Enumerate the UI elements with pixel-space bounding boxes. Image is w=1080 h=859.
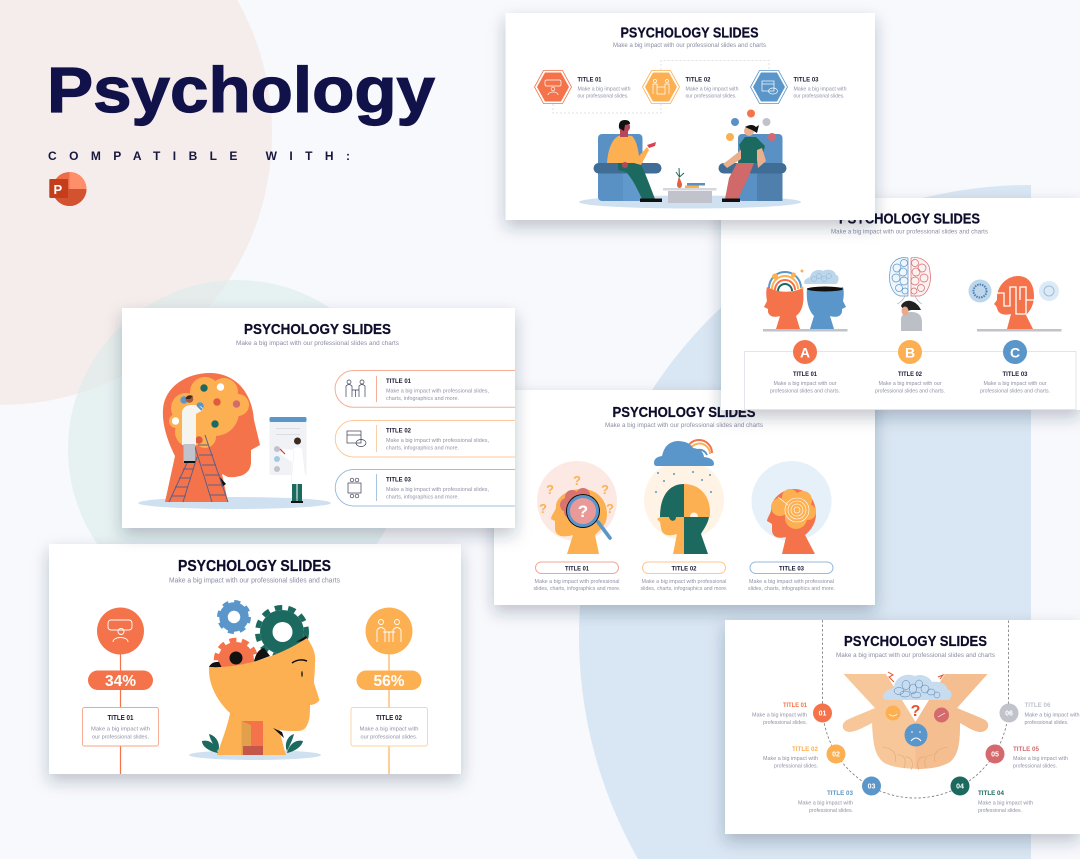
illustration B: brain and woman	[889, 258, 931, 331]
step 03: professional slides.	[809, 808, 853, 814]
step 03: 03	[868, 784, 875, 790]
illustration: doctor	[280, 438, 306, 503]
info box	[744, 352, 1076, 410]
timeline right	[351, 608, 428, 774]
panel: heads A B C slide (right)	[721, 198, 1080, 410]
illustration: puzzle head with rain cloud	[644, 440, 724, 554]
illustration: head with magnifier: ?	[539, 501, 547, 516]
text block: title 03: Make a big impact with our	[984, 381, 1047, 387]
illustration: checklist board	[270, 417, 306, 475]
icon circle: counselling	[97, 608, 144, 654]
badge C: C	[1010, 344, 1020, 360]
subheading: Make a big impact with our professional slides and charts	[831, 228, 989, 236]
text block: title 02	[640, 579, 728, 592]
dashed arc connector	[822, 620, 1008, 798]
badge B	[898, 340, 922, 364]
gear: orange	[216, 640, 256, 680]
step 06: 06	[1005, 710, 1013, 718]
subheading: Make a big impact with our professional slides and charts	[836, 652, 996, 659]
background circle: teal	[68, 280, 406, 618]
option: title 03: Make a big impact with professional slides,	[386, 487, 490, 493]
thought cloud	[804, 270, 839, 284]
step 01	[752, 702, 832, 726]
hexagon item: title 02: TITLE 02	[686, 76, 711, 84]
text block: title 01: TITLE 01	[793, 371, 817, 378]
subtitle: compatible with: COMPATIBLE WITH:	[48, 149, 350, 163]
pill label: title 01	[536, 562, 618, 574]
illustration: head with magnifier: ?	[606, 501, 614, 516]
stat: 56%: 56%	[373, 673, 405, 690]
brain: red half	[911, 258, 931, 296]
text block: title 02: Make a big impact with professional	[642, 579, 726, 585]
illustration: head with magnifier: ?	[578, 502, 588, 521]
timeline left	[82, 608, 158, 774]
text block: title 01: professional slides and charts.	[770, 388, 840, 394]
step 03: Make a big impact with	[798, 800, 853, 806]
step 04	[950, 776, 1033, 814]
background circle: blue	[579, 185, 1031, 859]
illustration: left armchair	[594, 134, 662, 201]
text block: title 03: professional slides and charts.	[980, 388, 1050, 394]
step 05: 05	[991, 752, 999, 758]
gear: blue	[219, 602, 249, 632]
badge C	[1003, 340, 1027, 364]
option: title 03: charts, infographics and more.	[386, 494, 459, 500]
icon: PowerPoint logo: P	[54, 182, 62, 197]
heading: PSYCHOLOGY SLIDES	[839, 210, 980, 228]
pill label: title 02	[642, 562, 726, 574]
hexagon item: title 03: Make a big impact with	[794, 86, 847, 92]
text block: title 01: slides, charts, infographics and more.	[534, 586, 620, 592]
text block: title 02: Make a big impact with our	[878, 381, 942, 387]
text block: title 03	[980, 371, 1050, 394]
hexagon item: title 01: TITLE 01	[578, 76, 602, 84]
cloud	[883, 675, 951, 700]
hair shadows	[209, 636, 308, 668]
pill label: title 03	[750, 562, 833, 574]
illustration: head with gears	[189, 602, 321, 760]
step 05: TITLE 05	[1013, 746, 1039, 753]
text block: title 03: Make a big impact with professional	[749, 579, 834, 585]
card: title 01: Make a big impact with	[91, 726, 150, 732]
illustration: floor	[579, 196, 801, 208]
icon: unsure face	[934, 708, 949, 722]
pill label: title 01: TITLE 01	[565, 566, 589, 572]
card: title 02: Make a big impact with	[360, 726, 418, 732]
card: title 02: TITLE 02	[376, 713, 402, 722]
icon: sad face	[904, 724, 928, 746]
step 02: professional slides.	[774, 764, 818, 770]
illustration C: maze head	[968, 276, 1062, 332]
lightning marks	[888, 672, 943, 682]
step 06: professional slides.	[1024, 720, 1068, 726]
icon: floating emotions	[726, 110, 776, 141]
illustration: head with spiral brain	[752, 461, 832, 554]
subheading: Make a big impact with our professional slides and charts	[613, 42, 767, 49]
icon: PowerPoint logo	[49, 172, 86, 206]
option: title 01	[335, 370, 515, 407]
step 06: TITLE 06	[1024, 702, 1051, 709]
step 01: Make a big impact with	[752, 712, 807, 718]
illustration: table with vase and books	[663, 168, 716, 203]
pill label: title 03: TITLE 03	[779, 566, 804, 572]
step 05: Make a big impact with	[1013, 756, 1068, 762]
panel: therapy session slide (top)	[506, 13, 875, 220]
option: title 03	[335, 470, 515, 506]
step 01: TITLE 01	[783, 702, 807, 709]
badge A	[793, 340, 817, 364]
option: title 01: charts, infographics and more.	[386, 396, 459, 402]
rainbow	[769, 272, 801, 291]
heading: PSYCHOLOGY SLIDES	[620, 24, 758, 42]
text block: title 03: slides, charts, infographics and more.	[748, 586, 835, 592]
step 01: professional slides.	[763, 720, 807, 726]
illustration: counsellor	[607, 120, 662, 202]
step 04: TITLE 04	[978, 790, 1004, 797]
option: title 02: Make a big impact with professional slides,	[386, 438, 490, 444]
illustration: right armchair	[718, 134, 786, 201]
panel: hands slide (bottom right)	[725, 620, 1080, 834]
option: title 02: charts, infographics and more.	[386, 446, 459, 452]
step 04: Make a big impact with	[978, 800, 1033, 806]
panel: brain spiral heads slide 03 (centre)	[494, 390, 875, 605]
leaves	[202, 734, 303, 753]
gear: green	[258, 608, 306, 656]
illustration: scientist on ladder	[182, 395, 203, 463]
text block: title 03: TITLE 03	[1002, 371, 1028, 378]
woman	[901, 312, 922, 331]
illustration: open hands	[843, 672, 988, 770]
step 03	[798, 776, 881, 814]
icon: team table outline	[348, 478, 361, 498]
brain: blue half	[889, 258, 908, 296]
stat: 56%	[356, 670, 422, 690]
step 05	[986, 744, 1068, 770]
text block: title 01: Make a big impact with our	[774, 381, 837, 387]
hexagon item: title 03: TITLE 03	[794, 76, 819, 84]
stat: 34%	[88, 670, 153, 690]
blue head	[807, 287, 846, 329]
hexagon item: title 01: Make a big impact with	[578, 86, 631, 92]
badge A: A	[800, 344, 810, 360]
hexagon item: title 02: Make a big impact with	[686, 86, 739, 92]
card: title 01: our professional slides.	[92, 734, 149, 740]
card: title 02: our professional slides.	[360, 734, 418, 740]
dashed connectors	[553, 60, 769, 113]
heading: PSYCHOLOGY SLIDES	[612, 404, 756, 421]
illustration: floor	[138, 497, 331, 509]
step 05: professional slides.	[1013, 764, 1057, 770]
hexagon item: title 03	[750, 70, 847, 104]
step 06: Make a big impact with	[1024, 712, 1080, 718]
heading: PSYCHOLOGY SLIDES	[244, 321, 391, 338]
step 02: 02	[832, 752, 840, 758]
illustration: big head with brain	[163, 373, 260, 502]
illustration: head with magnifier: ?	[573, 473, 581, 488]
option: title 01: TITLE 01	[386, 378, 411, 385]
subheading: Make a big impact with our professional slides and charts	[236, 340, 400, 347]
orange head	[764, 287, 803, 329]
illustration: ladder	[169, 435, 228, 502]
step 04: professional slides.	[978, 808, 1022, 814]
step 04: 04	[956, 784, 964, 790]
hexagon item: title 01: our professional slides.	[578, 94, 628, 100]
title: Psychology	[47, 54, 435, 126]
text block: title 02: TITLE 02	[898, 371, 922, 378]
illustration: head with magnifier: ?	[601, 482, 609, 497]
hexagon item: title 03: our professional slides.	[794, 94, 844, 100]
text block: title 02	[875, 371, 945, 394]
text block: title 02: professional slides and charts.	[875, 388, 945, 394]
heading: PSYCHOLOGY SLIDES	[844, 633, 987, 650]
icon: happy face	[886, 706, 900, 720]
icon circle: meeting	[366, 608, 412, 654]
stat: 34%: 34%	[105, 673, 136, 690]
panel: brain lab slide (left)	[122, 308, 515, 528]
option: title 02: TITLE 02	[386, 428, 411, 434]
step 02: TITLE 02	[792, 746, 818, 753]
illustration A: two open heads	[763, 270, 848, 332]
option: title 02	[335, 420, 515, 457]
text block: title 01	[770, 371, 840, 394]
text block: title 03	[748, 579, 835, 592]
question mark: ?	[911, 703, 920, 720]
icon: meeting outline	[346, 380, 365, 397]
background circle: pink	[0, 0, 272, 405]
door	[242, 721, 263, 755]
option: title 01: Make a big impact with professional slides,	[386, 388, 490, 394]
text block: title 01: Make a big impact with professional	[534, 579, 620, 585]
illustration: head with magnifier	[537, 461, 617, 554]
step 06	[1000, 702, 1080, 726]
subheading: Make a big impact with our professional slides and charts	[605, 422, 764, 429]
step 02	[763, 744, 846, 770]
pill label: title 02: TITLE 02	[672, 566, 697, 572]
badge B: B	[905, 344, 915, 360]
hexagon item: title 02	[642, 70, 739, 104]
option: title 03: TITLE 03	[386, 476, 411, 484]
step 03: TITLE 03	[827, 790, 853, 797]
hexagon item: title 02: our professional slides.	[686, 94, 736, 100]
card: title 02	[351, 708, 428, 746]
floor	[189, 750, 321, 760]
subheading: Make a big impact with our professional slides and charts	[169, 578, 340, 584]
text block: title 01	[534, 579, 620, 592]
head	[209, 638, 320, 755]
hexagon item: title 01	[534, 70, 631, 104]
step 02: Make a big impact with	[763, 756, 818, 762]
icon: calendar outline	[347, 431, 366, 446]
card: title 01	[82, 708, 158, 746]
step 01: 01	[819, 710, 826, 718]
panel: gears head slide (bottom left)	[49, 544, 461, 774]
heading: PSYCHOLOGY SLIDES	[178, 558, 331, 575]
illustration: head with magnifier: ?	[546, 482, 554, 497]
card: title 01: TITLE 01	[108, 713, 134, 722]
text block: title 02: slides, charts, infographics and more.	[640, 586, 728, 592]
illustration: client	[722, 125, 766, 202]
